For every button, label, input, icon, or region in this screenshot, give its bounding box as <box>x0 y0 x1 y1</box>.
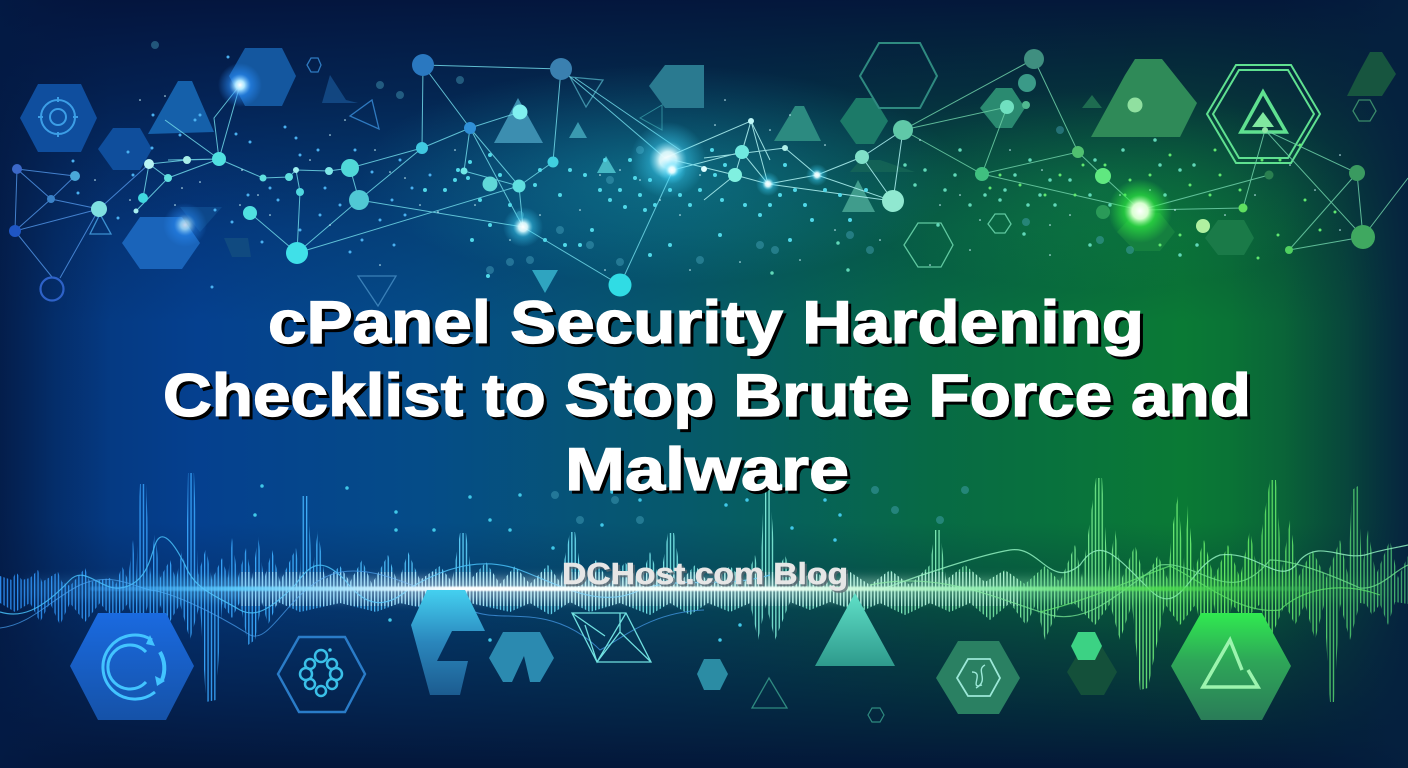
network connecting lines <box>15 59 1408 285</box>
hexagon with chain icon <box>936 641 1020 714</box>
outline hexagon with clover icon <box>278 637 365 712</box>
network nodes <box>9 49 1375 300</box>
subtitle: DCHost.com Blog: DCHost.com Blog <box>562 556 848 591</box>
central light beam <box>20 578 1390 600</box>
outline triangle <box>752 678 787 708</box>
stacked small hexagons <box>1067 632 1117 695</box>
geometric shapes: top left <box>20 48 704 306</box>
teal triangles <box>494 65 704 293</box>
outline hexagons <box>860 43 1376 267</box>
small hexagon with notch <box>489 632 554 682</box>
glowing nodes <box>163 63 1172 247</box>
hexagon with circular arrows icon <box>70 613 194 720</box>
translucent shapes <box>98 48 358 269</box>
title: Checklist to Stop Brute Force and <box>163 362 1251 429</box>
title: Malware <box>565 436 849 503</box>
small teal hexagon <box>697 659 728 690</box>
large green hexagon with triangle icon <box>1171 613 1291 720</box>
blue nodes <box>9 54 632 300</box>
soft glow band behind network <box>360 65 1360 290</box>
geometric shapes: bottom row <box>70 590 1291 722</box>
notched hexagon <box>411 590 485 695</box>
translucent shapes <box>774 52 1396 255</box>
outline shapes <box>90 58 603 306</box>
smooth waveform curves: blue <box>0 537 770 614</box>
hexagon with target icon <box>20 84 97 152</box>
smooth waveform curves: green <box>880 545 1408 599</box>
title <box>163 289 1251 503</box>
small outline hexagon <box>868 708 884 722</box>
teal and green nodes <box>701 49 1375 254</box>
triple hexagon with triangle icon <box>1207 65 1320 163</box>
particle dots <box>73 45 1340 667</box>
geometric shapes: top right <box>774 43 1396 267</box>
large teal triangle <box>815 593 895 666</box>
title: cPanel Security Hardening <box>268 289 1144 356</box>
wireframe pyramid <box>572 613 651 662</box>
waveform bars <box>0 473 1408 702</box>
